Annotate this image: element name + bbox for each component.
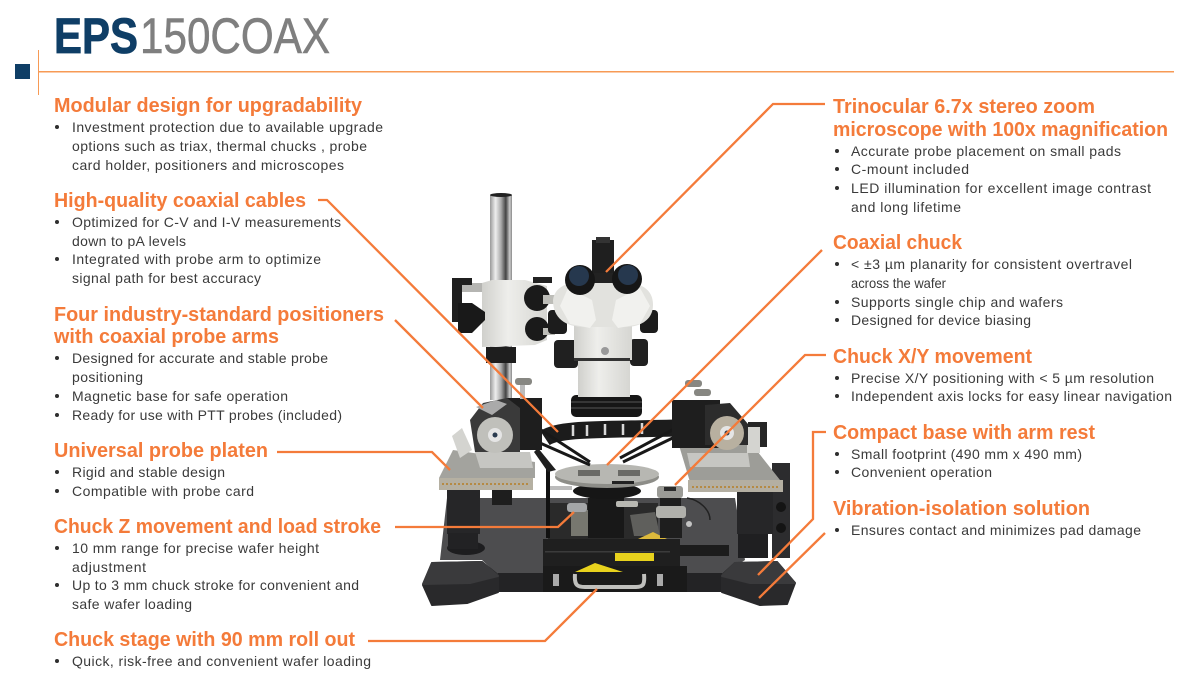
callout leader lines	[277, 104, 826, 641]
bullets: adjustment	[72, 559, 146, 575]
leader: positioners	[395, 320, 483, 408]
heading: Chuck Z movement and load stroke	[54, 516, 381, 538]
bullets: C-mount included	[851, 161, 969, 177]
bullets: across the wafer	[851, 275, 946, 291]
left probe platen	[439, 450, 535, 555]
bullets: and long lifetime	[851, 199, 961, 215]
bullets: Compatible with probe card	[72, 483, 254, 499]
bullets: signal path for best accuracy	[72, 270, 261, 286]
heading: Universal probe platen	[54, 440, 268, 462]
bullets: Small footprint (490 mm x 490 mm)	[851, 446, 1082, 462]
leader: chuck Z	[395, 512, 574, 527]
leader: vibration isolation	[759, 533, 825, 598]
feature: vibration isolation	[833, 498, 1141, 538]
leader: compact base	[758, 432, 826, 575]
bullets: LED illumination for excellent image contrast	[851, 180, 1151, 196]
heading: Coaxial chuck	[833, 232, 963, 254]
bullets: down to pA levels	[72, 233, 186, 249]
bullets: options such as triax, thermal chucks , probe	[72, 138, 367, 154]
bullets: Integrated with probe arm to optimize	[72, 251, 321, 267]
coaxial chuck	[555, 464, 659, 499]
bullets	[55, 540, 359, 612]
bullets	[55, 464, 254, 499]
bullets	[835, 370, 1172, 404]
feature: probe platen	[54, 440, 268, 499]
bullets: Supports single chip and wafers	[851, 294, 1063, 310]
heading: Chuck X/Y movement	[833, 346, 1032, 368]
leader: coaxial chuck	[607, 250, 822, 465]
cable chain	[534, 423, 683, 472]
bullets: card holder, positioners and microscopes	[72, 157, 344, 173]
feature: microscope	[833, 96, 1168, 215]
bullets	[55, 214, 341, 286]
bullets: Up to 3 mm chuck stroke for convenient and	[72, 577, 359, 593]
microscope stand pole	[490, 193, 512, 400]
bullets	[835, 446, 1082, 480]
feature: modular design	[54, 95, 383, 173]
bullets	[55, 350, 342, 423]
heading: Four industry-standard positioners	[54, 304, 384, 326]
control panel	[772, 463, 790, 558]
heading: High-quality coaxial cables	[54, 190, 306, 212]
leader: coaxial cables	[318, 200, 558, 432]
bullets: Accurate probe placement on small pads	[851, 143, 1121, 159]
main base plate and feet	[423, 498, 795, 605]
probe station machine illustration	[423, 193, 795, 605]
bullets: safe wafer loading	[72, 596, 192, 612]
bullets: Ready for use with PTT probes (included)	[72, 407, 342, 423]
stage centre and chuck X/Y assembly	[543, 468, 729, 592]
leader: probe platen	[277, 452, 450, 470]
microscope holder block	[452, 277, 555, 363]
bullets: Designed for accurate and stable probe	[72, 350, 328, 366]
bullets: Optimized for C-V and I-V measurements	[72, 214, 341, 230]
heading: Chuck stage with 90 mm roll out	[54, 629, 355, 651]
left positioner with probe arm	[452, 378, 542, 468]
bullets: Magnetic base for safe operation	[72, 388, 288, 404]
bullets: Precise X/Y positioning with < 5 µm resolution	[851, 370, 1154, 386]
bullets: Rigid and stable design	[72, 464, 225, 480]
feature: compact base	[833, 422, 1095, 480]
title: EPS	[54, 8, 138, 64]
feature: positioners	[53, 304, 384, 423]
heading: Trinocular 6.7x stereo zoom	[833, 96, 1095, 118]
feature: chuck X/Y movement	[833, 346, 1172, 404]
bullets: Investment protection due to available upgrade	[72, 119, 383, 135]
feature: coaxial cables	[54, 190, 341, 286]
leader: X/Y movement	[675, 355, 826, 485]
header rule and square marker	[15, 50, 1174, 95]
right probe platen	[678, 442, 783, 558]
bullets: Convenient operation	[851, 464, 992, 480]
heading: Vibration-isolation solution	[833, 498, 1090, 520]
feature: coaxial chuck	[833, 232, 1132, 328]
bullets: positioning	[72, 369, 143, 385]
bullets	[835, 256, 1132, 328]
title	[54, 8, 330, 64]
bullets: Designed for device biasing	[851, 312, 1031, 328]
bullets: Ensures contact and minimizes pad damage	[851, 522, 1141, 538]
bullets	[55, 119, 383, 173]
stereo zoom microscope	[548, 237, 658, 417]
leader: roll out	[368, 589, 597, 641]
feature: microscope: microscope with 100x magnification	[833, 119, 1168, 141]
bullets: 10 mm range for precise wafer height	[72, 540, 319, 556]
leader: microscope	[606, 104, 825, 272]
heading: Compact base with arm rest	[833, 422, 1095, 444]
heading: Modular design for upgradability	[54, 95, 363, 117]
bullets: Quick, risk-free and convenient wafer loading	[72, 653, 371, 669]
feature: positioners: with coaxial probe arms	[53, 326, 279, 348]
bullets	[835, 143, 1151, 215]
bullets: Independent axis locks for easy linear navigation	[851, 388, 1172, 404]
title: 150COAX	[140, 8, 330, 64]
feature: chuck stage roll out	[54, 629, 371, 669]
right positioner with probe arm	[672, 380, 767, 467]
chuck micrometer knob	[656, 486, 710, 538]
bullets: < ±3 µm planarity for consistent overtravel	[851, 256, 1132, 272]
feature: chuck Z movement	[54, 516, 381, 612]
